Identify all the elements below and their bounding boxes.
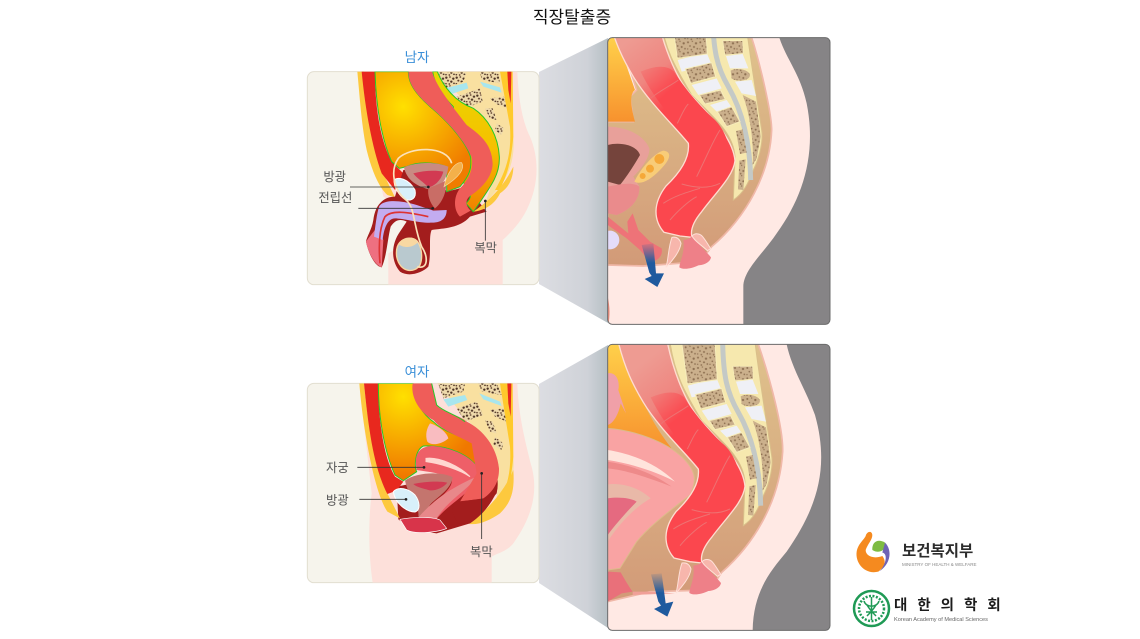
skin [608, 344, 821, 630]
bladder wall [405, 473, 453, 517]
bladder [608, 484, 651, 542]
abdominal muscle [362, 72, 403, 190]
title: 직장탈출증 [533, 8, 611, 27]
bladder [608, 126, 650, 186]
label: bladder: 방광 [326, 493, 349, 507]
abdominal fat [608, 38, 635, 122]
panel: male overview [307, 72, 539, 285]
urethra red [379, 212, 428, 263]
spine [437, 72, 514, 203]
urethra [608, 213, 662, 262]
icon: ministry swirl [856, 532, 890, 572]
rectum [412, 383, 499, 502]
label: uterus: 자궁 [326, 461, 349, 475]
vas deferens [394, 150, 452, 267]
zoom projection: male [539, 38, 608, 323]
text: academy english: Korean Academy of Medical Sciences [894, 617, 988, 623]
arrow [651, 573, 673, 617]
retrorectal fat [433, 72, 499, 212]
skin [608, 38, 810, 324]
glans [366, 227, 383, 267]
rectum and spine [618, 342, 772, 594]
label: bladder [326, 493, 407, 507]
heading: male: 남자 [405, 50, 430, 65]
seminal vesicle [634, 151, 669, 183]
seminal vesicle [444, 163, 463, 187]
posterior muscle [495, 72, 513, 190]
pelvic floor [397, 480, 498, 534]
logo: korean academy of medical sciences [854, 591, 1011, 626]
lower abdominal fat [359, 383, 400, 518]
lower back fat [473, 167, 513, 212]
text: ministry english: MINISTRY OF HEALTH & WELFARE [902, 562, 977, 567]
uterus [416, 446, 477, 518]
abdominal cavity [378, 383, 481, 481]
spine [437, 383, 514, 503]
vertebrae [438, 383, 507, 450]
penile base [608, 230, 620, 250]
ovary [426, 423, 448, 444]
discs [445, 82, 502, 95]
testis [396, 238, 422, 270]
uterus [608, 428, 694, 570]
rectum and spine [614, 38, 762, 269]
abdominal fat [357, 72, 395, 197]
label: prostate: 전립선 [318, 191, 352, 205]
panel: female overview [307, 383, 539, 583]
abdominal muscle [364, 383, 403, 494]
label: peritoneum: 복막 [474, 241, 497, 255]
logo: ministry of health and welfare [856, 532, 977, 572]
posterior muscle [495, 383, 513, 510]
heading: female: 여자 [405, 364, 430, 380]
pelvic cavity [608, 344, 783, 602]
label: peritoneum [470, 472, 493, 559]
label: bladder [323, 170, 430, 188]
pelvic cavity [608, 38, 772, 266]
panel: female rectal prolapse detail [608, 342, 830, 630]
arrow [642, 243, 664, 287]
text: ministry name: 보건복지부 [902, 542, 973, 560]
bladder and prostate [404, 163, 448, 208]
body skin [359, 383, 534, 583]
bladder [393, 488, 419, 512]
label: peritoneum: 복막 [470, 545, 493, 559]
zoom projection: female [539, 345, 608, 628]
dark pelvis inner [452, 492, 497, 523]
vulva [400, 517, 447, 533]
penile tissue [374, 201, 447, 240]
discs [443, 393, 502, 407]
body skin [376, 72, 536, 284]
rectum [408, 72, 493, 217]
icon: academy seal [854, 591, 889, 626]
label: prostate [318, 191, 434, 210]
label: uterus [326, 461, 425, 475]
label: bladder: 방광 [323, 170, 346, 184]
vertebrae [438, 72, 507, 135]
lower back fat [469, 470, 514, 524]
pelvic floor and penis [366, 167, 487, 274]
abdominal cavity [375, 72, 471, 192]
label: peritoneum [474, 200, 497, 255]
left edge skin [608, 298, 610, 322]
vaginal canal [417, 477, 477, 523]
ovary [608, 373, 626, 425]
lower pink tissue [608, 572, 633, 602]
panel: male rectal prolapse detail [601, 17, 830, 324]
abdominal fat [608, 344, 672, 448]
pubic bone [394, 178, 415, 200]
text: academy name: 대한의학회 [894, 597, 1011, 614]
